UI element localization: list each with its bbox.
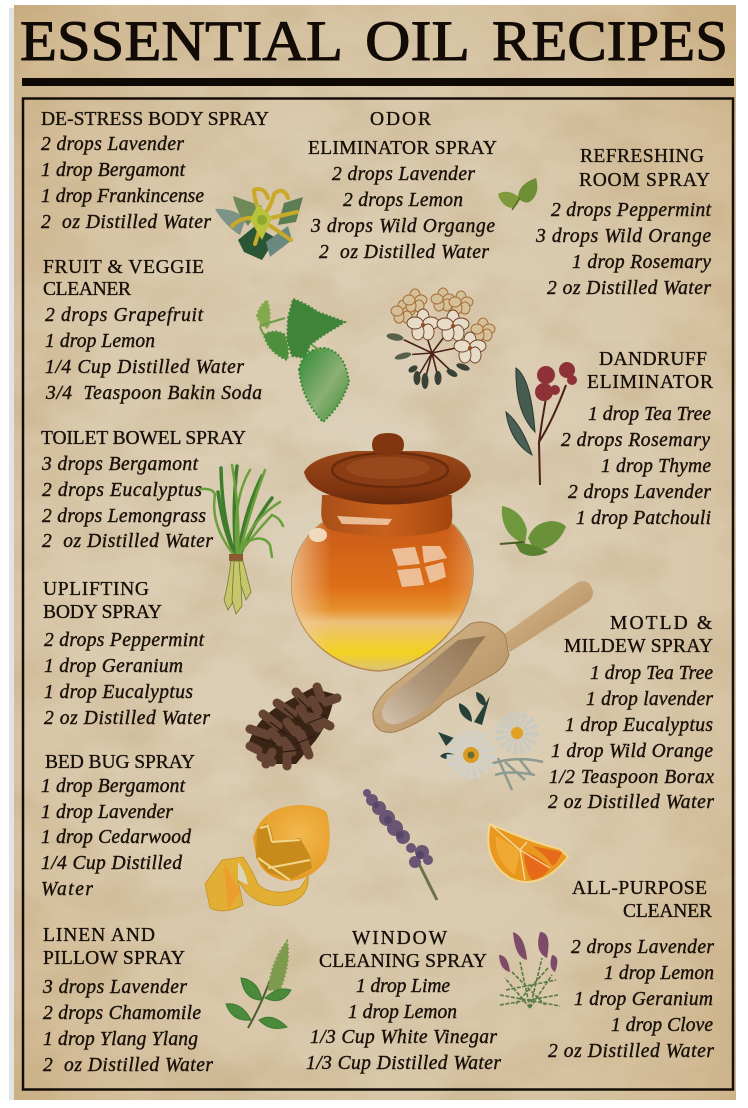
panel: toilet bowel spray: 2 drops Lemongrass — [42, 506, 206, 527]
jar neck — [321, 495, 452, 536]
panel: dandruff eliminator: 1 drop Thyme — [601, 456, 711, 477]
icon: mint sprig — [226, 941, 291, 1028]
jar body — [292, 518, 473, 671]
panel: mold and mildew spray: 1 drop Eucalyptus — [565, 715, 713, 736]
heading: TOILET BOWEL SPRAY — [41, 428, 246, 449]
heading: UPLIFTING — [43, 579, 149, 600]
panel: dandruff eliminator: 2 drops Rosemary — [561, 430, 710, 451]
panel: odor eliminator spray: 2 oz Distilled Water — [319, 242, 489, 263]
heading: PILLOW SPRAY — [43, 948, 185, 969]
icon: red flowers with dark leaves — [506, 362, 577, 485]
lid knob — [372, 433, 404, 456]
icon: lemongrass — [200, 465, 283, 614]
panel: fruit and veggie cleaner: 1 drop Lemon — [45, 331, 155, 352]
panel: window cleaning spray — [306, 928, 501, 1074]
heading: ELIMINATOR — [587, 372, 713, 393]
icon: mint leaves — [257, 299, 349, 422]
heading: CLEANER — [623, 901, 712, 922]
panel: mold and mildew spray — [548, 613, 714, 813]
panel: uplifting body spray: 2 oz Distilled Water — [44, 708, 210, 729]
panel: linen and pillow spray: 2 oz Distilled Water — [43, 1055, 213, 1076]
panel: odor eliminator spray: 2 drops Lemon — [343, 190, 463, 211]
panel: refreshing room spray: 2 oz Distilled Water — [547, 278, 711, 299]
panel: bed bug spray: 1 drop Cedarwood — [41, 827, 191, 848]
panel: mold and mildew spray: 1/2 Teaspoon Borax — [549, 767, 714, 788]
icon: daisies — [438, 692, 543, 790]
panel: dandruff eliminator: 1 drop Patchouli — [576, 508, 711, 529]
heading: FRUIT & VEGGIE — [43, 257, 204, 278]
panel: de-stress body spray: 1 drop Bergamont — [41, 160, 186, 181]
panel: mold and mildew spray: 1 drop Tea Tree — [590, 663, 713, 684]
heading — [43, 579, 162, 623]
panel: refreshing room spray — [535, 146, 712, 299]
panel: all-purpose cleaner: 2 drops Lavender — [571, 937, 714, 958]
panel: mold and mildew spray: 1 drop lavender — [586, 689, 713, 710]
icon: honey jar — [292, 433, 473, 671]
panel: de-stress body spray: 2 drops Lavender — [41, 134, 184, 155]
panel: refreshing room spray: 1 drop Rosemary — [572, 252, 711, 273]
panel: bed bug spray — [41, 752, 195, 900]
heading — [43, 925, 185, 969]
panel: toilet bowel spray: 2 drops Eucalyptus — [42, 480, 202, 501]
heading: BED BUG SPRAY — [45, 752, 195, 773]
heading: ROOM SPRAY — [579, 170, 710, 191]
heading: DANDRUFF — [599, 349, 707, 370]
heading — [308, 109, 497, 159]
icon: three green leaves — [500, 506, 566, 556]
heading: BODY SPRAY — [43, 602, 162, 623]
panel: bed bug spray: Water — [41, 879, 93, 900]
panel: dandruff eliminator: 1 drop Tea Tree — [588, 404, 711, 425]
panel: uplifting body spray: 1 drop Eucalyptus — [44, 682, 193, 703]
panel: all-purpose cleaner — [548, 878, 714, 1062]
panel: refreshing room spray: 3 drops Wild Orange — [535, 226, 711, 247]
icon: wooden scoop — [373, 581, 593, 732]
heading: MOTLD & — [610, 613, 712, 634]
panel: toilet bowel spray: 2 oz Distilled Water — [42, 531, 213, 552]
title: OIL — [365, 10, 470, 73]
icon: small green leaves — [498, 178, 537, 210]
panel: uplifting body spray: 2 drops Peppermint — [44, 630, 205, 651]
heading: MILDEW SPRAY — [564, 636, 713, 657]
panel: odor eliminator spray: 3 drops Wild Organge — [310, 216, 495, 237]
heading: ODOR — [370, 109, 431, 130]
icon: line-art flowers — [385, 288, 495, 389]
panel: bed bug spray: 1 drop Lavender — [41, 802, 173, 823]
panel: uplifting body spray — [43, 579, 210, 729]
panel: fruit and veggie cleaner: 1/4 Cup Distilled Water — [45, 357, 244, 378]
panel: dandruff eliminator — [561, 349, 713, 529]
panel: mold and mildew spray: 2 oz Distilled Water — [548, 792, 714, 813]
panel: fruit and veggie cleaner — [43, 257, 262, 404]
title: RECIPES — [492, 10, 728, 73]
heading: ALL-PURPOSE — [572, 878, 707, 899]
title — [20, 10, 728, 73]
jar lid — [304, 451, 471, 505]
panel: all-purpose cleaner: 1 drop Clove — [611, 1015, 713, 1036]
title rule — [22, 78, 734, 86]
heading: CLEANER — [43, 279, 131, 300]
icon: orange slice — [488, 824, 568, 882]
heading — [587, 349, 713, 393]
panel: linen and pillow spray — [42, 925, 213, 1076]
panel: linen and pillow spray: 2 drops Chamomile — [43, 1003, 201, 1024]
icon: thyme bush — [499, 932, 560, 1008]
panel: window cleaning spray: 1/3 Cup White Vinegar — [310, 1027, 497, 1048]
heading: DE-STRESS BODY SPRAY — [41, 109, 269, 130]
panel: de-stress body spray — [41, 109, 269, 233]
panel: linen and pillow spray: 3 drops Lavender — [42, 977, 187, 998]
panel: dandruff eliminator: 2 drops Lavender — [568, 482, 711, 503]
panel: fruit and veggie cleaner: 3/4 Teaspoon Bakin Soda — [45, 383, 262, 404]
panel: odor eliminator spray: 2 drops Lavender — [332, 164, 475, 185]
panel: bed bug spray: 1 drop Bergamont — [41, 776, 186, 797]
title: ESSENTIAL — [20, 10, 343, 73]
panel: window cleaning spray: 1/3 Cup Distilled Water — [306, 1053, 501, 1074]
panel: all-purpose cleaner: 1 drop Lemon — [604, 963, 714, 984]
panel: uplifting body spray: 1 drop Geranium — [44, 656, 183, 677]
heading: LINEN AND — [43, 925, 155, 946]
window reflection — [309, 516, 447, 587]
panel: toilet bowel spray — [41, 428, 246, 552]
heading: REFRESHING — [580, 146, 704, 167]
glass sheen — [292, 518, 473, 671]
heading: WINDOW — [352, 928, 448, 949]
panel: linen and pillow spray: 1 drop Ylang Ylang — [43, 1029, 198, 1050]
icon: lavender sprig — [363, 789, 437, 900]
panel: window cleaning spray: 1 drop Lime — [356, 976, 450, 997]
panel: window cleaning spray: 1 drop Lemon — [348, 1002, 457, 1023]
heading — [319, 928, 487, 972]
heading: ELIMINATOR SPRAY — [308, 138, 497, 159]
panel: odor eliminator spray — [308, 109, 497, 263]
panel: fruit and veggie cleaner: 2 drops Grapefruit — [45, 305, 204, 326]
icon: pine cone — [248, 687, 337, 766]
icon: peeled lemon — [205, 805, 330, 911]
panel: refreshing room spray: 2 drops Peppermint — [551, 200, 712, 221]
panel: de-stress body spray: 1 drop Frankincense — [41, 186, 204, 207]
panel: mold and mildew spray: 1 drop Wild Orange — [551, 741, 713, 762]
heading — [579, 146, 710, 191]
panel: all-purpose cleaner: 1 drop Geranium — [574, 989, 713, 1010]
heading: CLEANING SPRAY — [319, 951, 487, 972]
heading — [572, 878, 712, 922]
panel: bed bug spray: 1/4 Cup Distilled — [41, 853, 182, 874]
panel: all-purpose cleaner: 2 oz Distilled Water — [548, 1041, 714, 1062]
heading — [43, 257, 204, 300]
icon: ylang ylang flower — [215, 189, 303, 260]
panel: de-stress body spray: 2 oz Distilled Water — [41, 212, 211, 233]
heading — [564, 613, 713, 657]
panel: toilet bowel spray: 3 drops Bergamont — [41, 454, 199, 475]
